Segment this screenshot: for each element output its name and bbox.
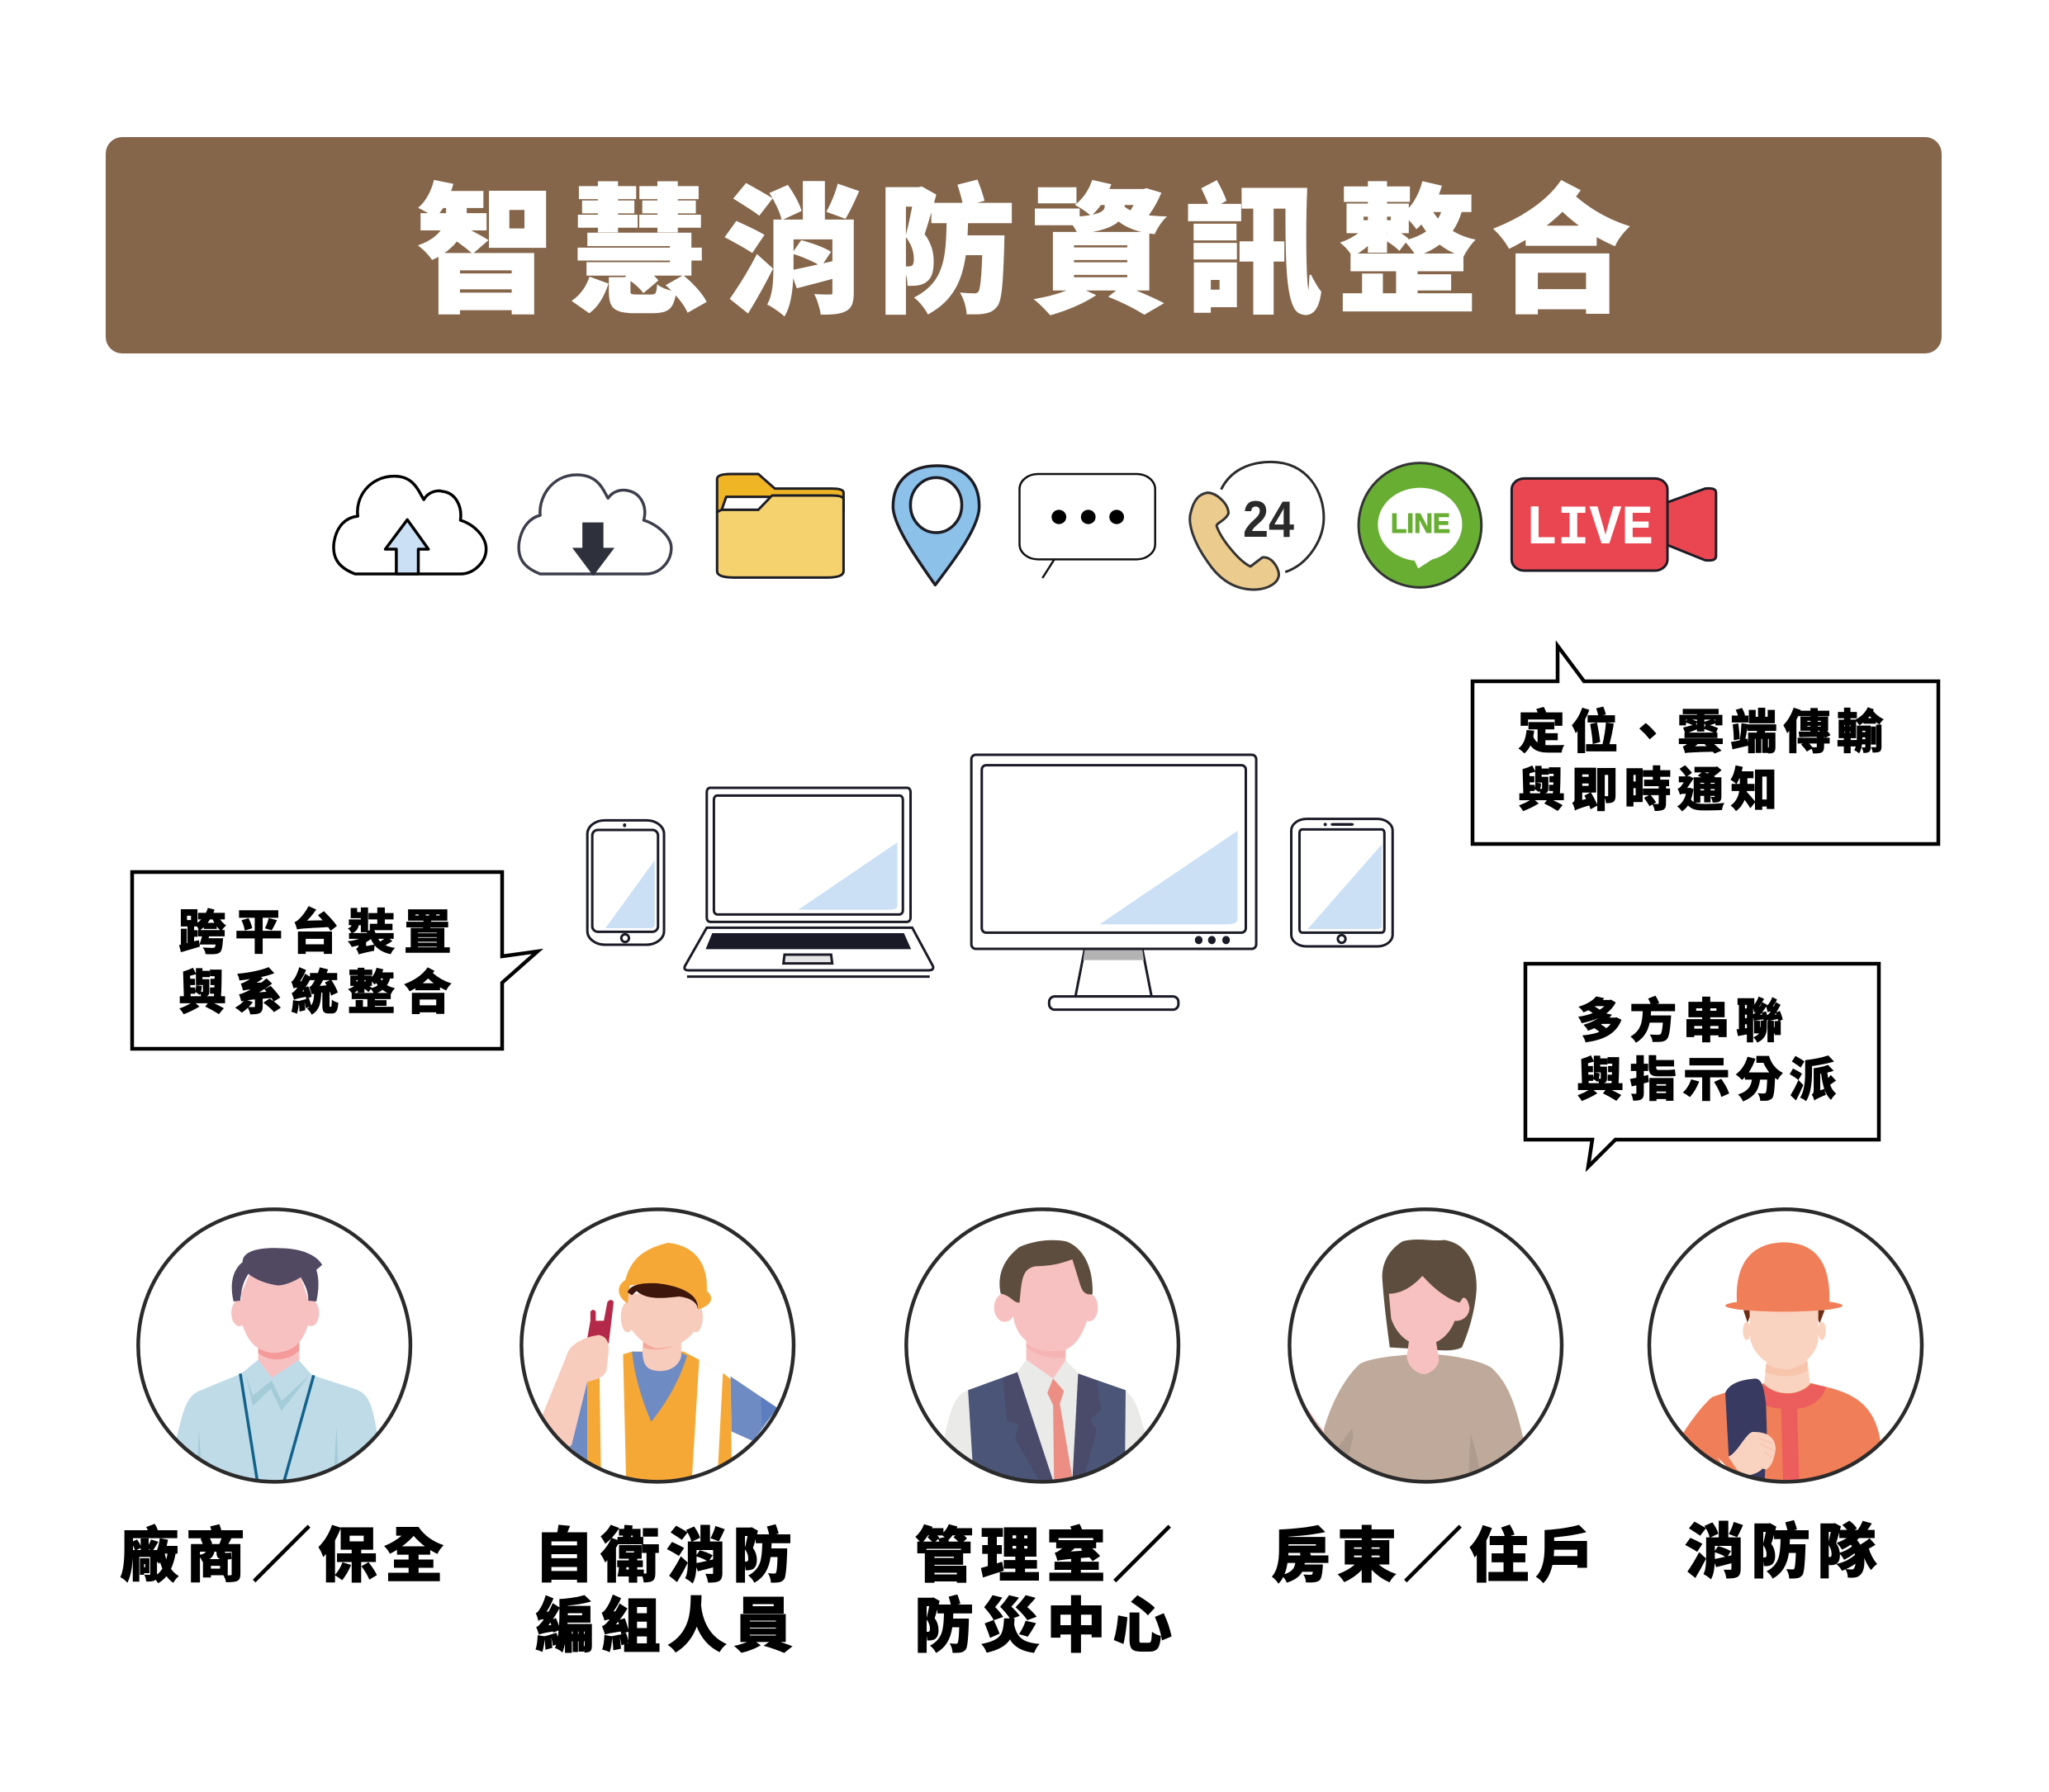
- callout: multi-party: 與指示分派: [1577, 1054, 1842, 1107]
- icon: cloud upload: [334, 476, 486, 574]
- icon: folder: [717, 474, 843, 577]
- callout: multi-party: 多方串聯: [1577, 995, 1789, 1048]
- callout: multi-party: [1525, 964, 1879, 1167]
- callout: cross platform: 跨平台裝置: [178, 906, 460, 960]
- icon: chat bubble: [1019, 474, 1155, 578]
- person: management room: [906, 1209, 1179, 1484]
- person: fire safety team: [521, 1209, 794, 1484]
- icon: LINE badge: [1359, 463, 1482, 587]
- label: fire safety team: 自衛消防: [534, 1524, 799, 1590]
- callout: cross platform: [132, 872, 538, 1049]
- laptop: [685, 788, 933, 977]
- label: management room: 防災中心: [914, 1594, 1179, 1660]
- icon row: [334, 462, 1716, 590]
- label: fire safety team: 編組人員: [535, 1594, 799, 1660]
- phone: [587, 820, 664, 945]
- infographic canvas: [106, 137, 1942, 1653]
- icon text: LINE: LINE: [1391, 508, 1450, 538]
- icon: phone handset: [1190, 462, 1324, 590]
- label: landlord / resident: 房東／住戶: [1271, 1524, 1601, 1590]
- icon text: 24: 24: [1243, 491, 1294, 548]
- devices: [587, 755, 1392, 1010]
- icon: location pin: [893, 466, 979, 585]
- callout: positioning, cloud transfer: [1473, 646, 1938, 844]
- label: management room: [914, 1524, 1179, 1660]
- persons row two: [906, 1209, 1562, 1484]
- persons row one: [138, 1209, 794, 1484]
- callout: cross platform: 與系統整合: [178, 966, 460, 1020]
- title banner: 智慧消防資訊整合: [416, 175, 1645, 330]
- callout: positioning, cloud transfer: 定位、雲端傳輸: [1518, 706, 1890, 759]
- label: fire brigade: 消防隊: [1685, 1519, 1883, 1586]
- icon: live camera: [1511, 478, 1716, 571]
- person: fire brigade: [1649, 1209, 1922, 1484]
- icon text: LIVE: LIVE: [1525, 497, 1653, 561]
- tablet: [1292, 819, 1392, 946]
- person: landlord / resident: [1289, 1209, 1562, 1484]
- title banner: [106, 137, 1942, 353]
- icon: cloud download: [519, 475, 671, 576]
- label: vendor / security: 廠商／保全: [120, 1524, 450, 1590]
- label: fire safety team: [534, 1524, 799, 1660]
- monitor: [971, 755, 1256, 1010]
- person: vendor / security: [138, 1209, 410, 1484]
- callout: positioning, cloud transfer: 與即時通知: [1518, 764, 1784, 817]
- label: management room: 管理室／: [914, 1524, 1179, 1590]
